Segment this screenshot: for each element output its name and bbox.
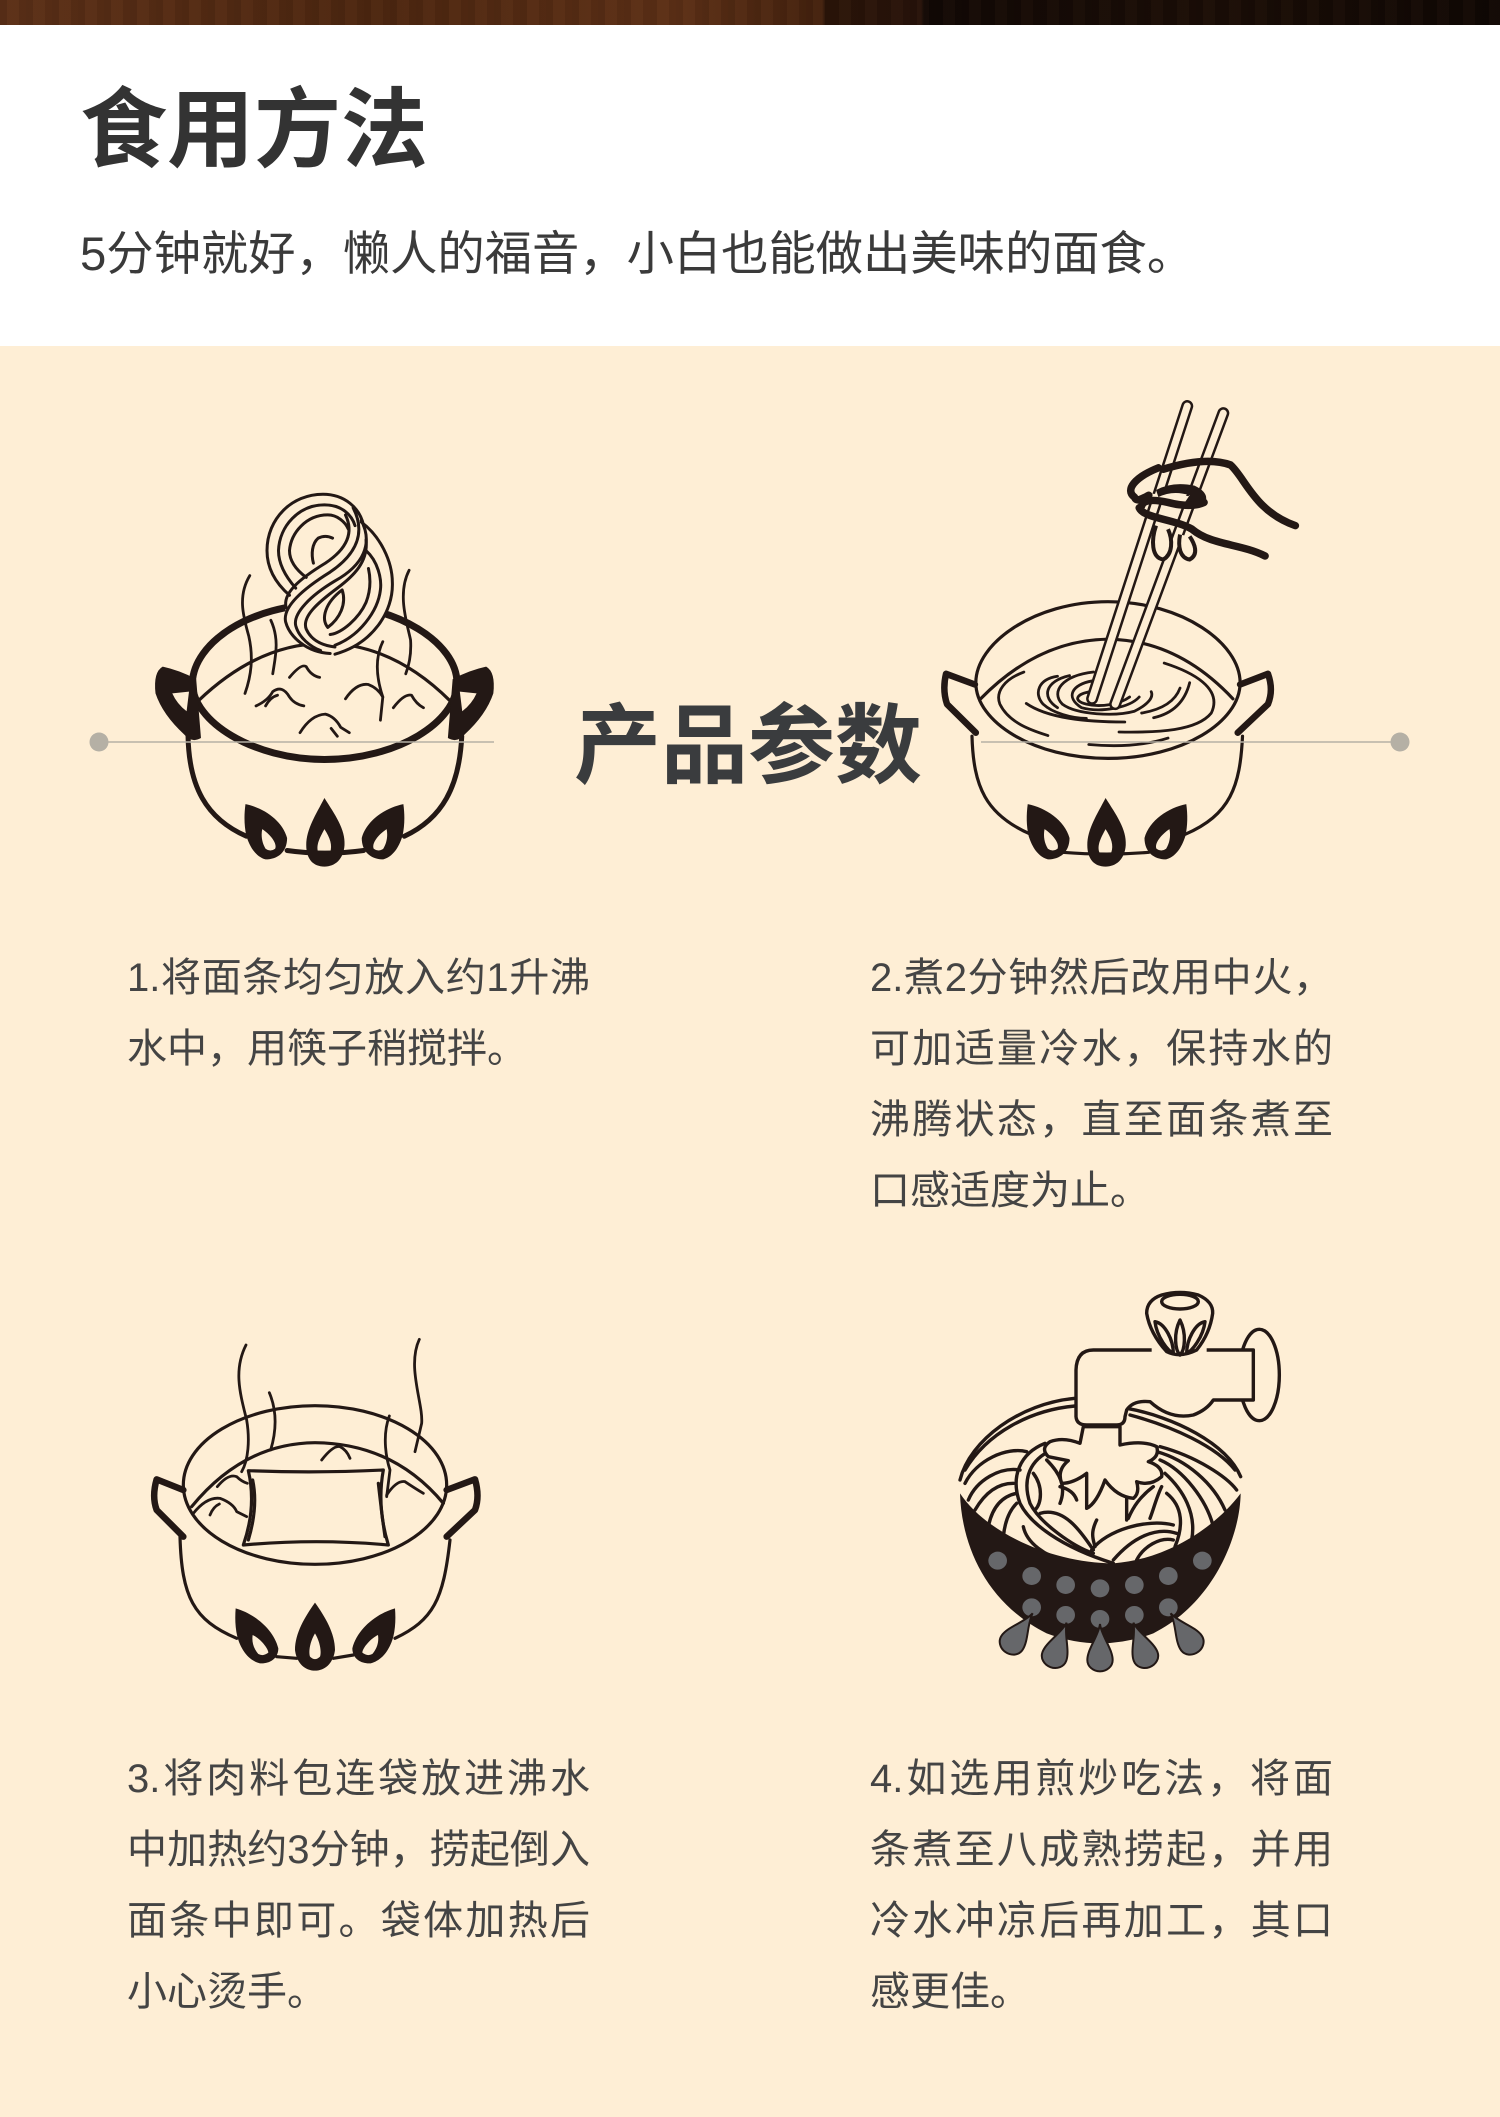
step 4 text bbox=[870, 1757, 1333, 2014]
step 4 text: 4.如选用煎炒吃法，将面 bbox=[870, 1757, 1333, 1801]
icon: faucet rinsing noodles in colander bbox=[960, 1292, 1279, 1671]
step 3 text bbox=[127, 1757, 590, 2014]
step 4 text: 冷水冲凉后再加工，其口 bbox=[870, 1899, 1333, 1943]
step 3 text: 面条中即可。袋体加热后 bbox=[127, 1899, 590, 1943]
step 2 text bbox=[870, 956, 1333, 1213]
step 3 text: 小心烫手。 bbox=[127, 1970, 327, 2014]
step 1 text: 水中，用筷子稍搅拌。 bbox=[127, 1027, 527, 1071]
step 3 text: 中加热约3分钟，捞起倒入 bbox=[127, 1828, 590, 1872]
subtitle: 5分钟就好，懒人的福音，小白也能做出美味的面食。 bbox=[80, 228, 1194, 281]
heading divider line bbox=[90, 732, 1410, 752]
icon: seasoning packet in pot bbox=[154, 1339, 477, 1671]
step 2 text: 可加适量冷水，保持水的 bbox=[870, 1027, 1333, 1071]
step 2 text: 沸腾状态，直至面条煮至 bbox=[870, 1098, 1333, 1142]
title: 食用方法 bbox=[80, 82, 428, 179]
step 2 text: 口感适度为止。 bbox=[870, 1169, 1150, 1213]
step 3 text: 3.将肉料包连袋放进沸水 bbox=[127, 1757, 590, 1801]
step 2 text: 2.煮2分钟然后改用中火， bbox=[870, 956, 1333, 1000]
step 1 text: 1.将面条均匀放入约1升沸 bbox=[127, 956, 590, 1000]
icon: stirring pot with chopsticks bbox=[944, 406, 1295, 867]
step 4 text: 条煮至八成熟捞起，并用 bbox=[870, 1828, 1333, 1872]
overlaid heading: 产品参数 bbox=[574, 698, 922, 795]
white header panel bbox=[0, 25, 1500, 346]
step 1 text bbox=[127, 956, 590, 1071]
icon: noodles dropped in boiling pot bbox=[155, 494, 494, 867]
top wood photo strip bbox=[0, 0, 1500, 25]
step 4 text: 感更佳。 bbox=[870, 1970, 1030, 2014]
